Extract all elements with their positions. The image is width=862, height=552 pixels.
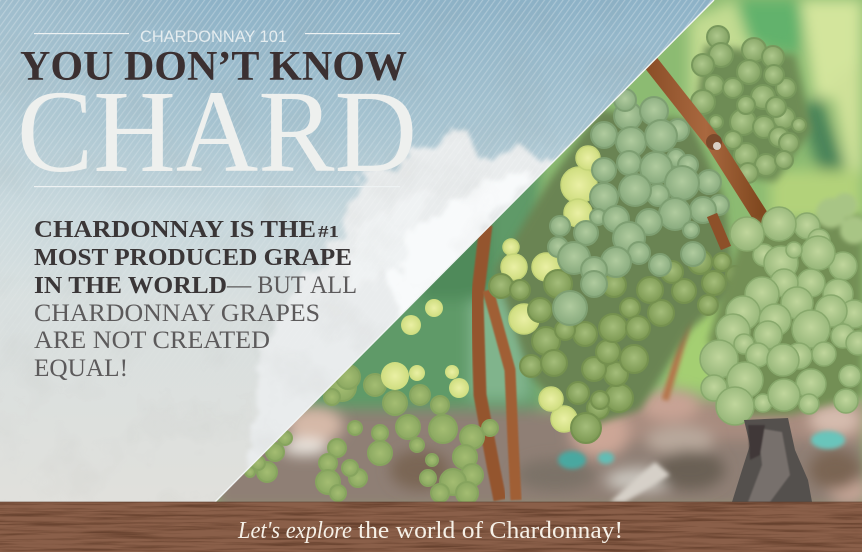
blurred vineyard floor — [281, 389, 862, 504]
panel: sky and paper diagonal — [0, 0, 720, 502]
statement text block: EQUAL! — [34, 355, 128, 382]
grape cluster: right, in focus — [700, 193, 862, 425]
statement text block: #1 — [318, 222, 339, 241]
title block — [17, 28, 417, 197]
diagonal edge highlight — [215, 0, 714, 502]
statement text block: CHARDONNAY IS THE — [34, 216, 316, 243]
statement text block: IN THE WORLD — [34, 272, 227, 299]
footer text: the world of Chardonnay! — [358, 518, 623, 544]
eyebrow rule right — [305, 33, 400, 34]
cloud — [247, 126, 567, 467]
grape cluster: upper right — [691, 26, 812, 183]
statement text block: CHARDONNAY GRAPES — [34, 300, 320, 327]
title rule — [34, 186, 400, 187]
photo: chardonnay vineyard — [216, 0, 862, 502]
statement text block: ARE NOT CREATED — [34, 327, 270, 354]
statement text block: — BUT ALL — [226, 272, 357, 299]
statement text block — [34, 216, 357, 382]
footer wood band — [0, 502, 862, 552]
heading: you don't know: YOU DON’T KNOW — [20, 44, 407, 90]
footer text: Let's explore — [237, 518, 352, 544]
heading: chard: CHARD — [17, 66, 417, 197]
paper texture — [0, 0, 720, 502]
vine trunk — [732, 418, 812, 502]
photo background — [216, 0, 862, 502]
grape cluster: lower left, blurred — [245, 299, 498, 504]
vine cane: upper — [651, 63, 761, 248]
statement text block: MOST PRODUCED GRAPE — [34, 244, 352, 271]
eyebrow rule left — [34, 33, 129, 34]
eyebrow: CHARDONNAY 101 — [140, 28, 287, 46]
grape cluster: centre — [489, 89, 744, 443]
vine canes: lower — [477, 198, 690, 500]
stripe overlay — [0, 0, 712, 210]
